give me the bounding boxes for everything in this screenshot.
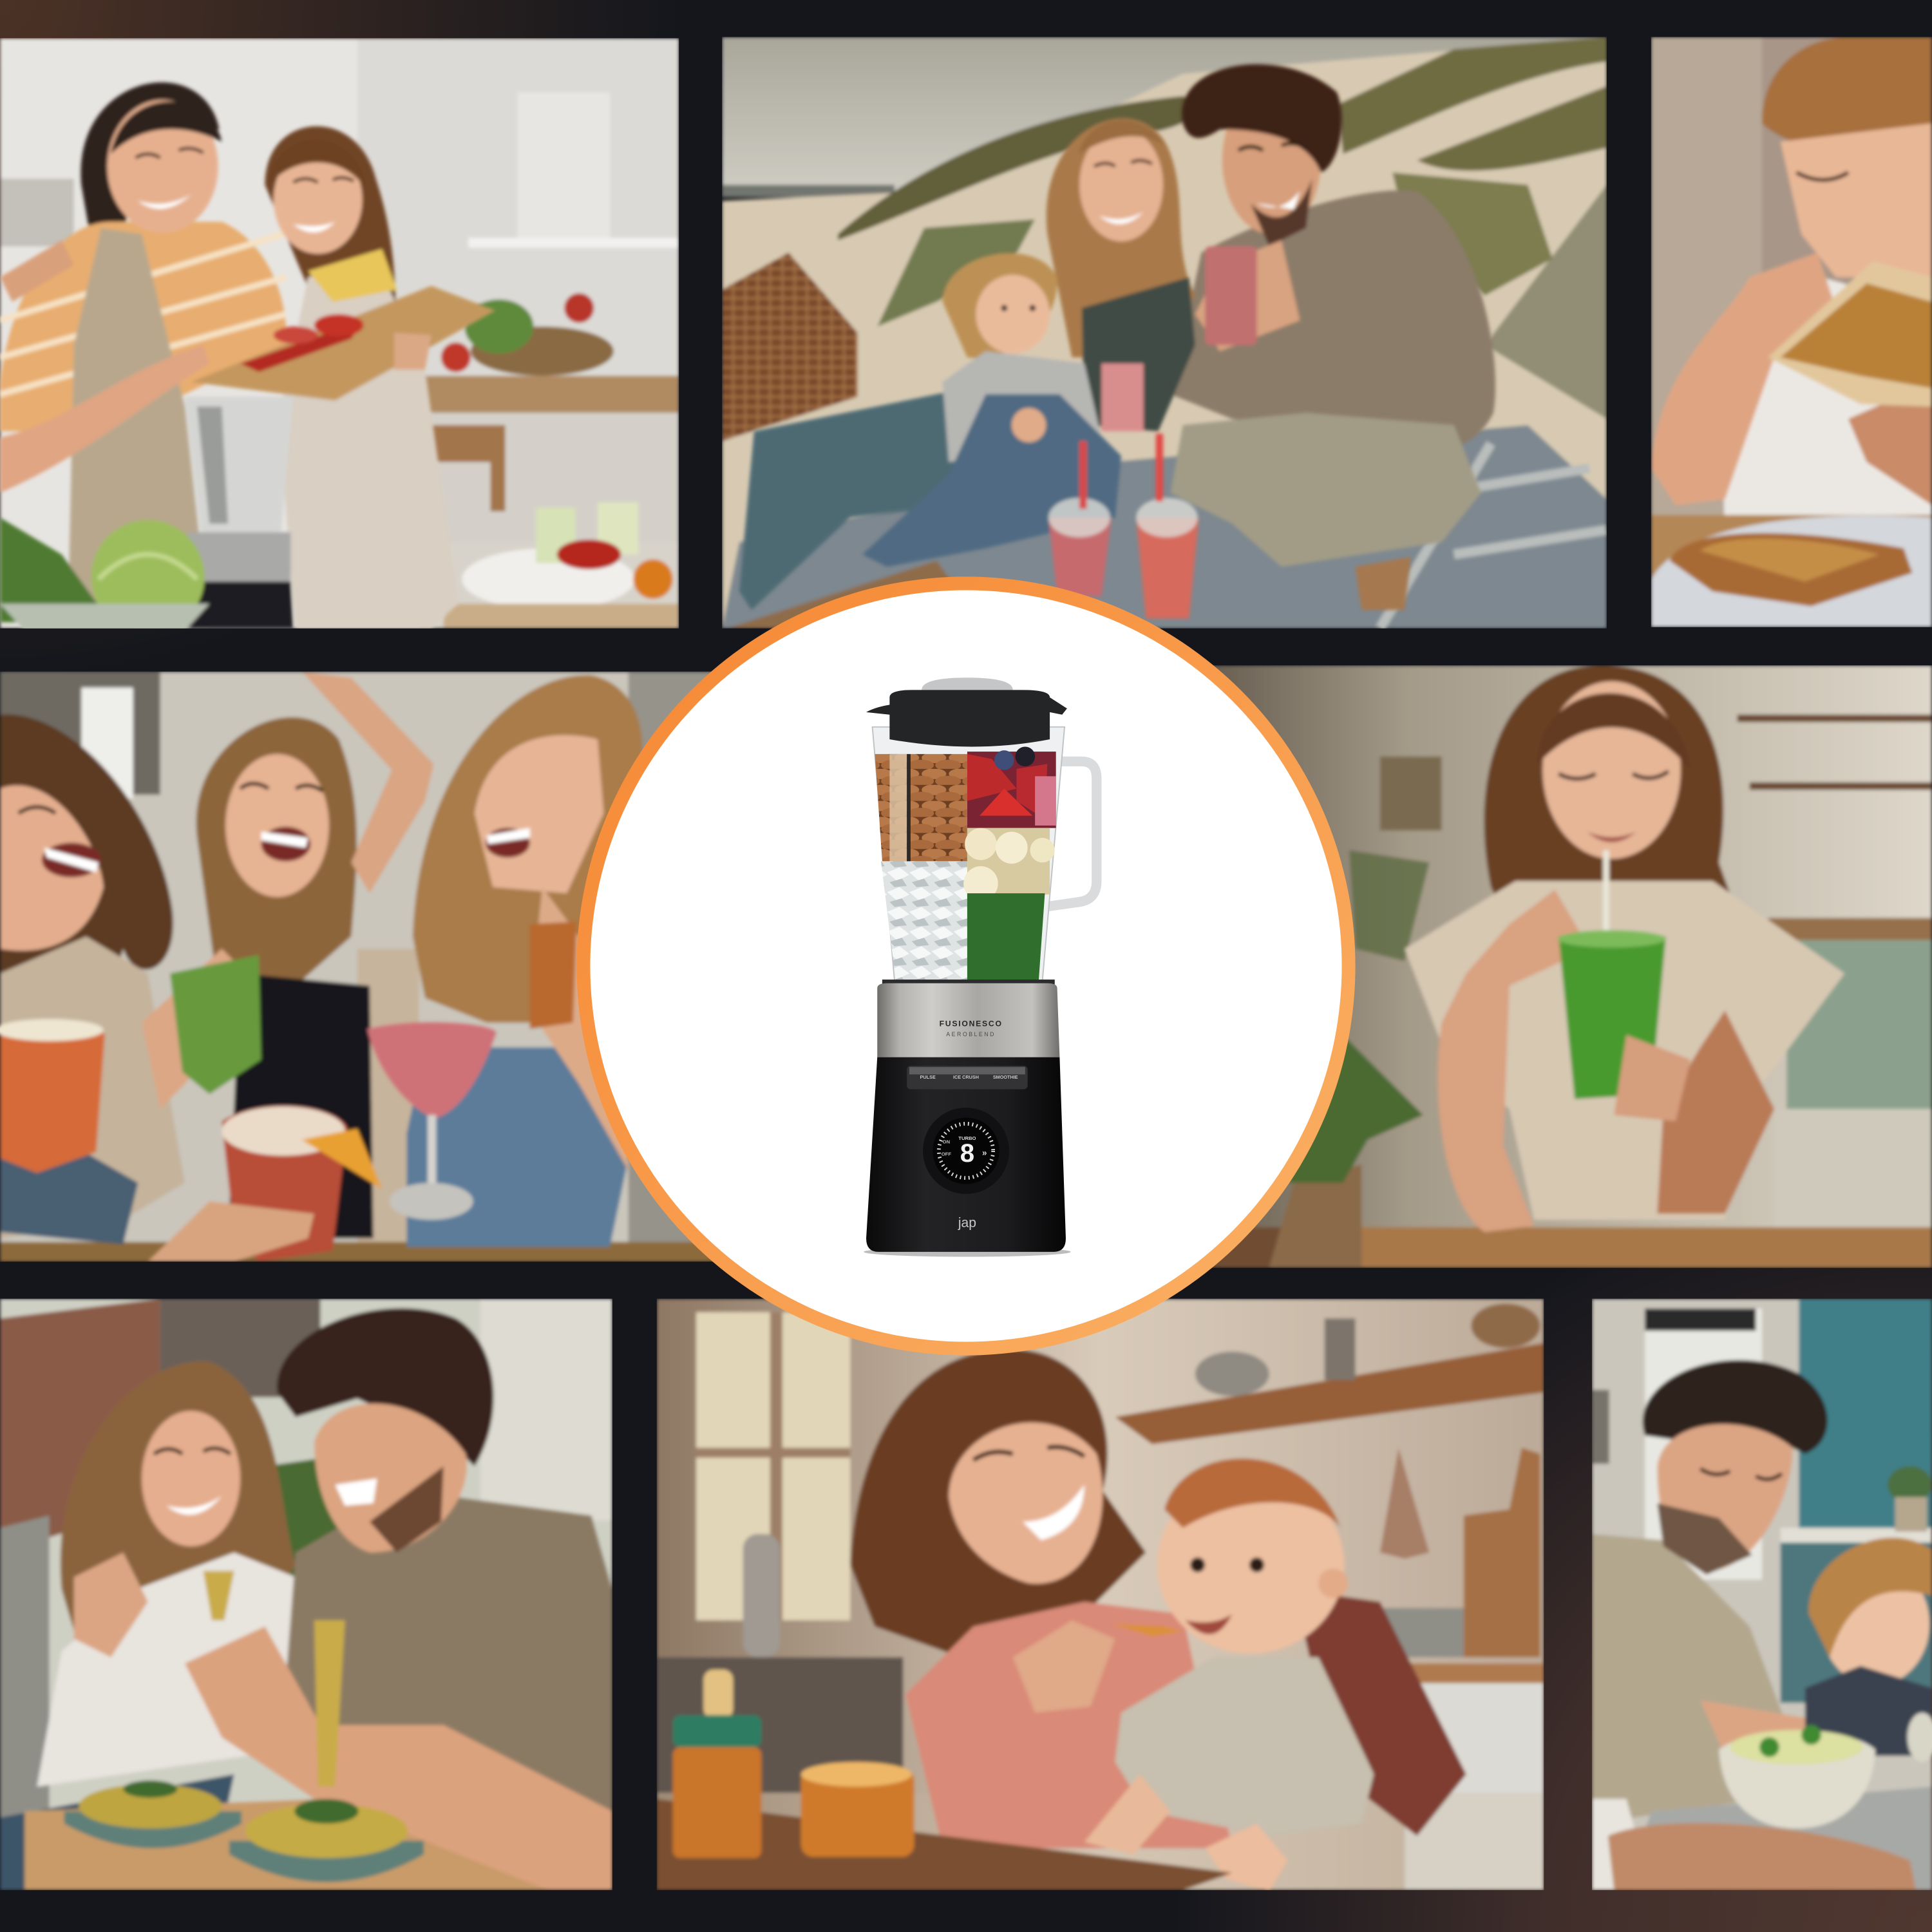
- son: [1805, 1538, 1932, 1756]
- blender glass jar: [873, 727, 1065, 981]
- ingredients: bananas: [963, 828, 1055, 901]
- mother: [0, 82, 286, 629]
- digital dial: [923, 1108, 1009, 1194]
- man eating: [185, 1308, 612, 1890]
- smoothie glasses: [1048, 247, 1257, 618]
- mode buttons: [907, 1066, 1028, 1089]
- leafy vegetables: [0, 518, 209, 633]
- digital dial: TURBO: [958, 1135, 976, 1141]
- panel: three friends laughing with cocktails: [0, 672, 739, 1262]
- panel: mother and daughter preparing food in kitchen: [0, 38, 679, 633]
- bowl and table: [1608, 1712, 1932, 1890]
- brand name: FUSIONESCO: [940, 1019, 1003, 1028]
- mode buttons: ICE CRUSH: [953, 1074, 979, 1080]
- panel: mother feeding baby: [657, 1299, 1544, 1891]
- jap logo: jap: [958, 1216, 976, 1231]
- blender product: [864, 677, 1097, 1257]
- boy body and head: [1651, 37, 1932, 542]
- blender contact shadow: [864, 1247, 1071, 1257]
- child: [862, 253, 1121, 567]
- friend on left: [0, 714, 185, 1244]
- panel: woman drinking green smoothie: [1183, 665, 1932, 1268]
- mother: [850, 1349, 1466, 1848]
- blender silver collar: AEROBLEND: [946, 1031, 996, 1037]
- panel: family on the beach with smoothies: [722, 37, 1607, 629]
- central circle with orange ring: [576, 576, 1356, 1356]
- ingredients: berries: [967, 746, 1056, 828]
- ingredients: ice: [881, 861, 967, 981]
- friend on right: [406, 675, 642, 1247]
- blender jug handle: [1045, 761, 1097, 907]
- digital dial: OFF: [942, 1151, 951, 1157]
- daughter: [265, 126, 459, 629]
- plate with toast: [1651, 515, 1932, 627]
- table: [24, 1571, 548, 1890]
- ingredients: spinach: [967, 893, 1045, 981]
- digital dial: 8: [960, 1139, 974, 1168]
- peanut butter toast held up: [1768, 261, 1932, 406]
- potted plant: [1269, 1035, 1423, 1268]
- mode buttons: SMOOTHIE: [993, 1074, 1018, 1080]
- mother: [739, 118, 1195, 610]
- panel: couple laughing over pasta: [0, 1299, 612, 1890]
- baby: [1084, 1459, 1374, 1891]
- blender silver collar: [877, 980, 1059, 1057]
- ingredients: almonds: [875, 754, 967, 861]
- woman: [1405, 665, 1844, 1232]
- blender on counter: [185, 397, 293, 629]
- cocktails: [0, 922, 576, 1262]
- mode buttons: PULSE: [920, 1074, 936, 1080]
- blender lid: [866, 677, 1067, 746]
- woman eating: [0, 1361, 296, 1890]
- panel: father and son eating broccoli soup: [1592, 1299, 1932, 1890]
- digital dial: »: [982, 1148, 987, 1158]
- green smoothie glass and straw: [1557, 850, 1690, 1121]
- baby bottle and jars on table: [657, 1669, 1232, 1890]
- father: [1171, 64, 1495, 610]
- digital dial: ON: [943, 1139, 950, 1145]
- panel: child eating peanut butter toast: [1651, 37, 1932, 627]
- cutting board with red peppers: [191, 286, 495, 401]
- friend in middle: [142, 672, 433, 1238]
- father: [1592, 1360, 1895, 1890]
- blender black base: [866, 1057, 1066, 1252]
